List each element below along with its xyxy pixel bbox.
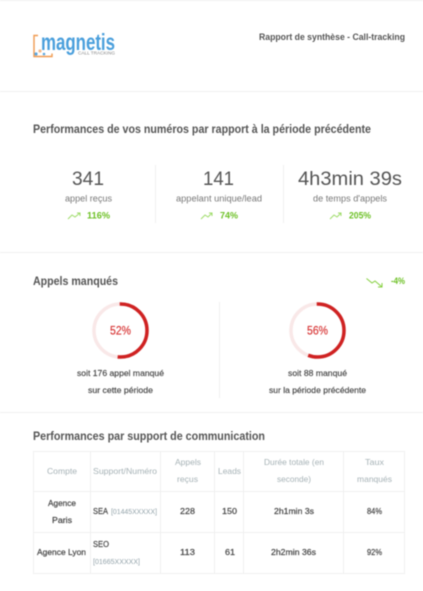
stat: appelants uniques: 74% (220, 210, 238, 220)
table row: Agence Paris: 84% (367, 506, 382, 516)
heading: appels manqués: Appels manqués (33, 276, 118, 288)
stat: appels reçus (65, 168, 113, 220)
caption: previous period (269, 368, 366, 395)
table row: Agence Lyon: [01665XXXXX] (93, 557, 140, 566)
table row: Agence Paris: 150 (222, 506, 237, 516)
trend: -4% (366, 276, 405, 287)
table header row: Compte (47, 466, 77, 476)
report title: Rapport de synthèse - Call-tracking (259, 32, 405, 42)
table header row: manqués (357, 474, 392, 484)
stat: temps d'appels: de temps d'appels (313, 194, 388, 204)
stat: temps d'appels (298, 168, 402, 220)
panel: KPI stats (65, 165, 402, 223)
table row: Agence Paris: Paris (52, 515, 72, 525)
donut: 56%: 56% (307, 326, 328, 338)
table row: Agence Lyon (37, 539, 382, 566)
stat: appels reçus: 341 (72, 168, 104, 190)
logo: magnetis: CALL TRACKING (78, 50, 116, 56)
heading: performances: Performances de vos numéros par rapport à la période précédente (33, 124, 371, 136)
table row: Agence Lyon: 92% (367, 547, 382, 557)
table row: Agence Lyon: 113 (180, 547, 195, 557)
table row: Agence Paris (48, 498, 382, 525)
logo: magnetis: magnetis (41, 29, 115, 55)
table row: Agence Lyon: 2h2min 36s (271, 547, 316, 557)
table row: Agence Lyon: 61 (225, 547, 235, 557)
table header row: seconde) (277, 474, 311, 484)
donut: 52%: 52% (110, 326, 131, 338)
logo: magnetis (34, 29, 116, 56)
table row: Agence Paris: [01445XXXXX] (111, 507, 157, 516)
caption: current period: soit 176 appel manqué (77, 368, 164, 378)
stat: appelants uniques: 141 (203, 168, 234, 190)
table header row: Durée totale (en (264, 457, 324, 467)
stat: appels reçus: 116% (87, 210, 110, 220)
stat: temps d'appels: 205% (349, 210, 371, 220)
table header row: Appels (175, 457, 201, 467)
stat: temps d'appels: 4h3min 39s (298, 168, 402, 190)
donut: 56% (291, 304, 344, 357)
stat: appelants uniques (176, 168, 262, 220)
stat: appels reçus: appel reçus (65, 194, 113, 204)
table row: Agence Paris: 2h1min 3s (274, 506, 314, 516)
table header row: Leads (218, 466, 241, 476)
table row: Agence Paris: 228 (180, 506, 195, 516)
table header row (47, 457, 392, 484)
table: support performance (34, 452, 404, 574)
stat: appelants uniques: appelant unique/lead (176, 194, 262, 204)
caption: current period: sur cette période (88, 385, 153, 395)
table row: Agence Lyon: SEO (93, 539, 109, 549)
table row: Agence Paris: SEA (93, 506, 108, 516)
caption: previous period: soit 88 manqué (288, 368, 347, 378)
table header row: Support/Numéro (93, 466, 157, 476)
caption: current period (77, 368, 164, 395)
trend: -4%: -4% (391, 276, 405, 286)
heading: performances par support: Performances par support de communication (33, 431, 265, 443)
table header row: reçus (177, 474, 198, 484)
caption: previous period: sur la période précédente (269, 385, 366, 395)
table row: Agence Lyon: Agence Lyon (37, 547, 86, 557)
table header row: Taux (365, 457, 385, 467)
table row: Agence Paris: Agence (48, 498, 76, 508)
donut: 52% (94, 304, 147, 357)
